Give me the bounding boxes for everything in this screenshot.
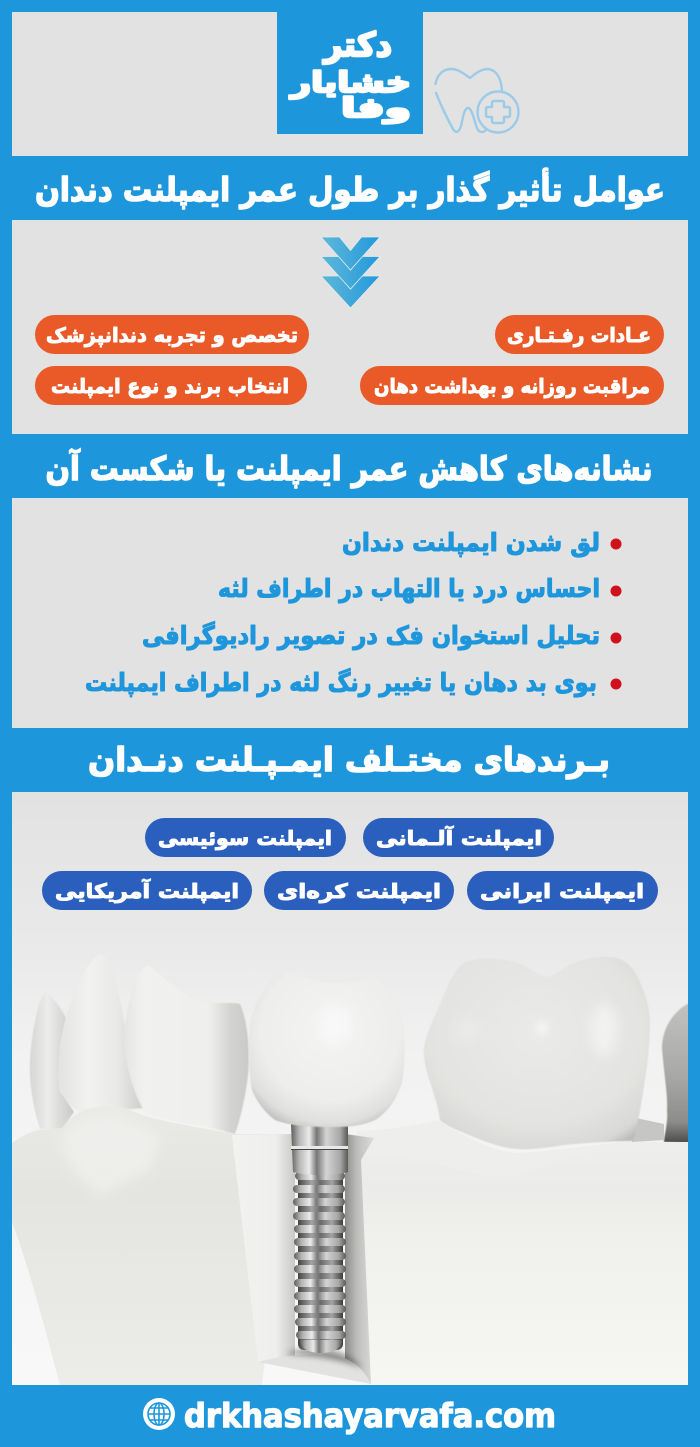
tooth: implant crown	[249, 1010, 404, 1128]
list item 2: احساس درد یا التهاب در اطراف لثه	[218, 574, 600, 604]
illustration: teeth and dental implant	[12, 954, 689, 1385]
pill: korean implant: ایمپلنت کره‌ای	[277, 879, 441, 904]
pill: dentist expertise: تخصص و تجربه دندانپزشک	[46, 323, 298, 348]
tooth: right edge molar	[662, 1003, 689, 1143]
pill: iranian implant: ایمپلنت ایرانی	[480, 879, 644, 904]
pill: korean implant	[264, 871, 454, 910]
icon: tooth with plus	[436, 69, 518, 132]
gum: left block	[12, 1106, 292, 1385]
icon: globe	[143, 1398, 175, 1430]
pill: german implant	[363, 818, 554, 857]
implant: collar	[291, 1124, 348, 1175]
cavity: right wall	[345, 1134, 374, 1384]
panel: factors	[12, 220, 688, 434]
pill: american implant	[42, 871, 252, 910]
pill: iranian implant	[467, 871, 658, 910]
gum highlight	[70, 1140, 150, 1188]
pill: swiss implant	[145, 818, 346, 857]
tooth: canine	[126, 1002, 249, 1134]
gum behind right edge	[632, 1118, 664, 1142]
panel: brands with implant illustration	[12, 792, 688, 1385]
logo block: وفا	[341, 93, 411, 124]
logo block: دکتر	[322, 25, 392, 65]
gum: right block front	[362, 1190, 688, 1260]
logo block: خشایار	[289, 66, 411, 99]
pill: american implant: ایمپلنت آمریکایی	[55, 878, 239, 904]
icon: triple chevron arrow	[321, 237, 380, 308]
pill: behavior habits	[495, 315, 664, 354]
pill: brand selection	[35, 366, 307, 405]
pill: behavior habits: عـادات رفـتـاری	[507, 323, 651, 347]
gum: right back ridge	[462, 1142, 688, 1176]
heading: brands: بـرندهای مختـلف ایمـپـلنت دنـدان	[88, 740, 610, 780]
implant shadow on floor	[286, 1348, 362, 1368]
implant: screw threads	[293, 1172, 346, 1353]
cavity floor	[258, 1354, 371, 1384]
tooth: left incisor	[60, 1001, 142, 1110]
pill: brand selection: انتخاب برند و نوع ایمپلنت	[51, 374, 289, 399]
pill: daily care: مراقبت روزانه و بهداشت دهان	[374, 374, 650, 398]
cavity: left wall	[232, 1134, 295, 1362]
list item 4: بوی بد دهان یا تغییر رنگ لثه در اطراف ایمپلنت	[85, 668, 597, 698]
pill: daily care	[360, 366, 664, 405]
tooth: right molar	[424, 957, 650, 1149]
panel: symptoms	[12, 498, 688, 728]
tooth: far left incisor	[30, 992, 74, 1129]
list item 1: لق شدن ایمپلنت دندان	[342, 528, 600, 558]
panel: header	[12, 12, 688, 156]
pill: german implant: ایمپلنت آلـمانی	[376, 825, 542, 851]
logo block	[277, 0, 423, 134]
pill: swiss implant: ایمپلنت سوئیسی	[158, 826, 332, 851]
pill: dentist expertise	[35, 315, 309, 354]
list item 3: تحلیل استخوان فک در تصویر رادیوگرافی	[142, 621, 600, 651]
footer: website: drkhashayarvafa.com	[184, 1396, 556, 1435]
